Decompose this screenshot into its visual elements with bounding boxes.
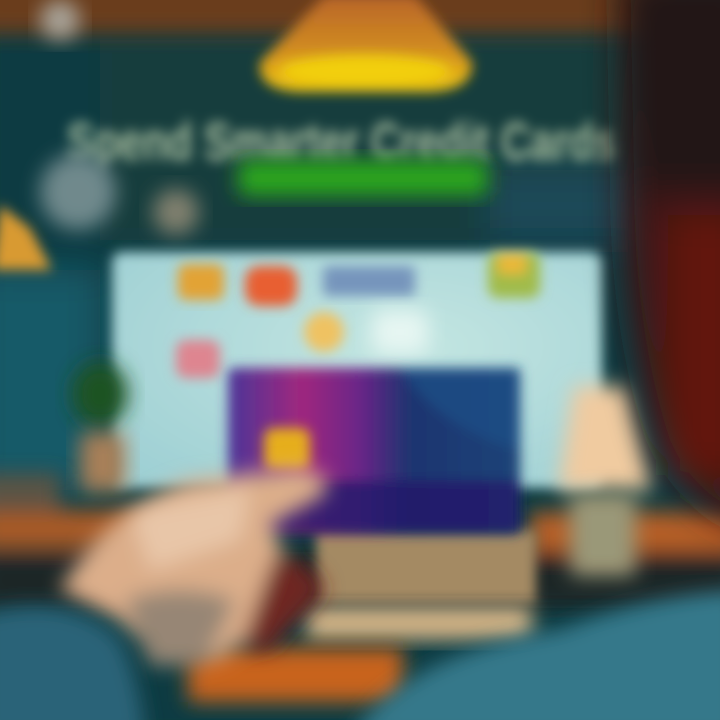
icon: small badge xyxy=(153,189,199,235)
paper on desk xyxy=(306,606,532,640)
icon: ceiling lamp xyxy=(260,0,472,92)
icon: left wall lamp xyxy=(0,205,52,270)
icon: leaves xyxy=(72,362,128,426)
person head xyxy=(618,0,720,530)
desk xyxy=(0,474,720,608)
icon: green yellow tile xyxy=(488,252,540,298)
ceiling band xyxy=(0,0,670,34)
icon: yellow tile xyxy=(178,264,224,300)
text block: screen heading xyxy=(323,266,415,296)
icon: grey circle badge xyxy=(40,154,116,230)
icon: pot xyxy=(80,432,126,492)
icon: shade xyxy=(558,386,652,490)
right sleeve xyxy=(350,590,720,720)
box under card xyxy=(316,530,536,602)
icon: wall light top left xyxy=(40,0,80,40)
icon: card chip xyxy=(264,428,310,470)
icon: red tile xyxy=(245,266,297,306)
plant xyxy=(72,362,128,492)
icon: pink tile xyxy=(176,340,220,378)
panel: credit card xyxy=(228,368,520,534)
icon: base xyxy=(570,494,636,576)
lower desk xyxy=(188,648,403,702)
panel: dashboard screen xyxy=(112,252,602,488)
icon: pale tile xyxy=(372,310,428,354)
hand xyxy=(60,468,327,665)
left sleeve xyxy=(0,607,145,720)
table lamp xyxy=(558,386,652,576)
screen icons xyxy=(176,252,540,378)
subtitle green bar xyxy=(238,160,488,196)
icon: yellow circle xyxy=(304,312,344,352)
